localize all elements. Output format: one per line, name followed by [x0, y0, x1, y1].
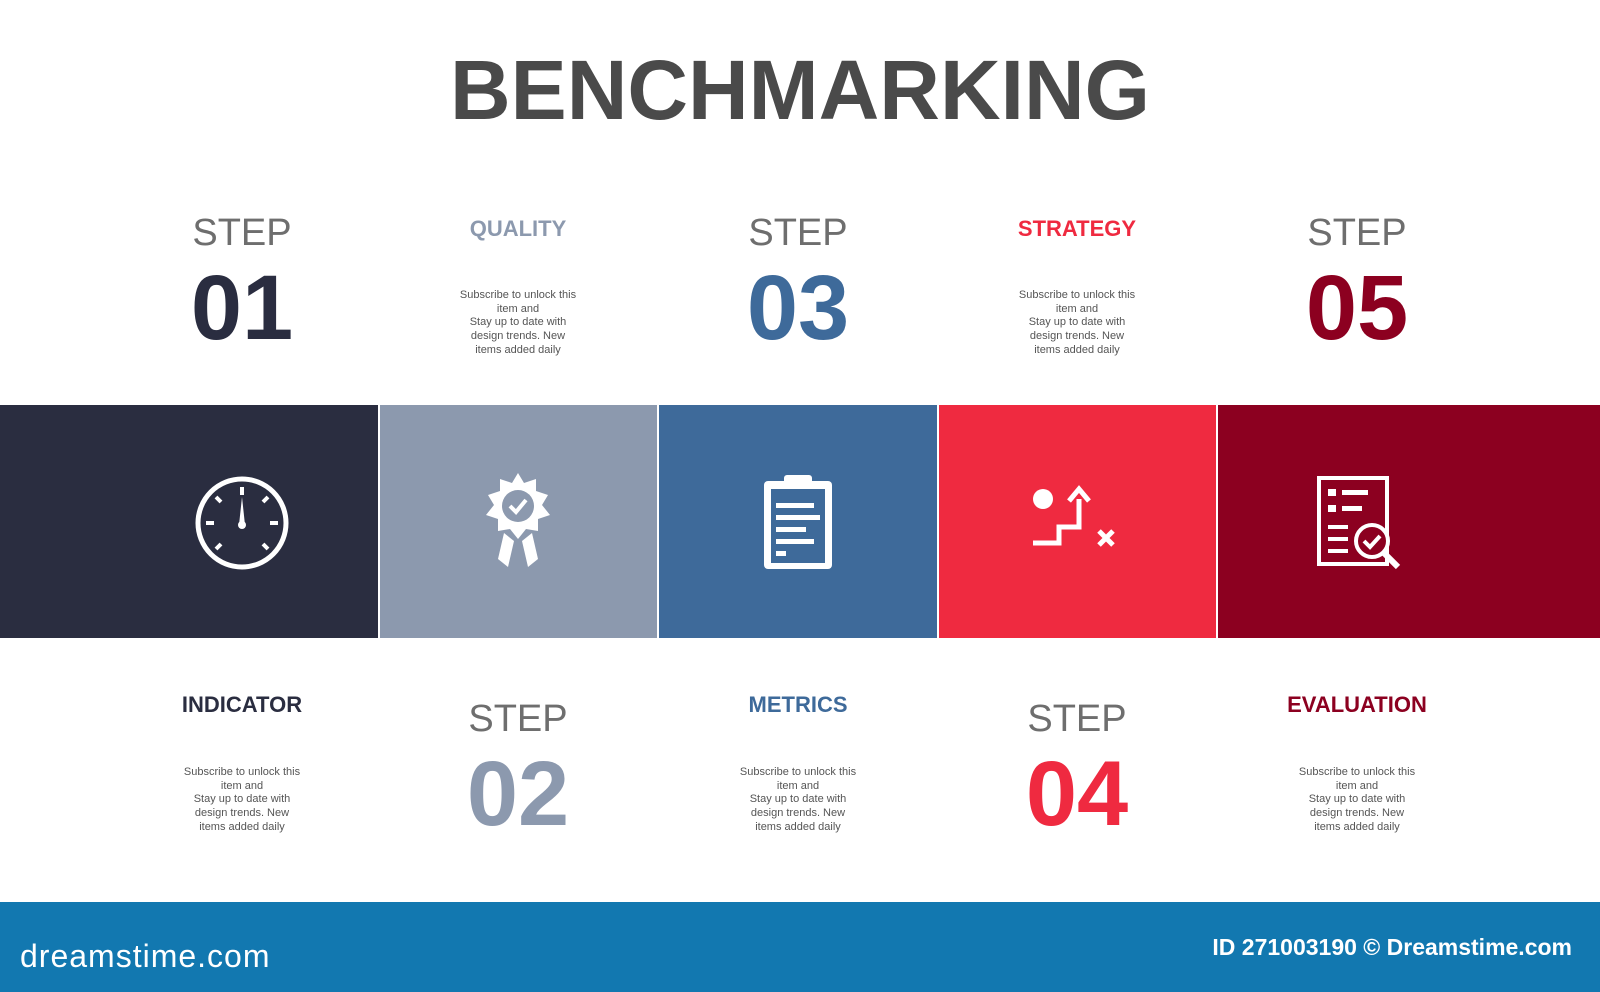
- icon: award: [486, 473, 550, 567]
- text: strategy: Stay up to date with design trends. New items added daily: [1029, 316, 1125, 356]
- step 02: 02: [467, 743, 569, 845]
- step 03: 03: [747, 257, 849, 359]
- text: strategy: Subscribe to unlock this item and: [1019, 289, 1135, 315]
- panel 3: metrics: [659, 405, 937, 638]
- text: quality: Subscribe to unlock this item and: [460, 289, 576, 315]
- panel 1: indicator: [0, 405, 378, 638]
- text: evaluation: [1287, 692, 1427, 833]
- step 04: [1026, 698, 1128, 845]
- panel 4: strategy: [939, 405, 1216, 638]
- text: evaluation: Subscribe to unlock this item and: [1299, 766, 1415, 792]
- icon: gauge: [196, 476, 288, 570]
- step 02: [467, 698, 569, 845]
- footer logo: dreamstime.com: [20, 938, 270, 974]
- text: metrics: [740, 692, 856, 833]
- panel 5: evaluation: [1218, 405, 1600, 638]
- step 01: [191, 212, 293, 359]
- step 01: 01: [191, 257, 293, 359]
- text: metrics: Stay up to date with design trends. New items added daily: [750, 793, 846, 833]
- text: strategy: [1018, 216, 1136, 356]
- step 04: STEP: [1027, 698, 1127, 740]
- step 03: STEP: [748, 212, 848, 254]
- step 05: 05: [1306, 257, 1408, 359]
- footer bar: [0, 902, 1600, 992]
- text: metrics: Subscribe to unlock this item and: [740, 766, 856, 792]
- step 03: [747, 212, 849, 359]
- text: indicator: INDICATOR: [182, 692, 302, 717]
- text: quality: Stay up to date with design trends. New items added daily: [470, 316, 566, 356]
- title: BENCHMARKING: [450, 43, 1150, 137]
- step 05: [1306, 212, 1408, 359]
- step 01: STEP: [192, 212, 292, 254]
- icon: clipboard: [764, 475, 832, 569]
- icon: steps: [1033, 485, 1115, 547]
- text: evaluation: Stay up to date with design trends. New items added daily: [1309, 793, 1405, 833]
- panel 2: quality: [380, 405, 657, 638]
- text: quality: [460, 216, 576, 356]
- text: metrics: METRICS: [748, 692, 848, 717]
- footer id: ID 271003190 © Dreamstime.com: [1212, 934, 1572, 960]
- icon: report search: [1317, 476, 1400, 570]
- step 02: STEP: [468, 698, 568, 740]
- text: strategy: STRATEGY: [1018, 216, 1136, 241]
- text: indicator: [182, 692, 302, 833]
- text: evaluation: EVALUATION: [1287, 692, 1427, 717]
- text: quality: QUALITY: [470, 216, 566, 241]
- text: indicator: Subscribe to unlock this item and: [184, 766, 300, 792]
- step 05: STEP: [1307, 212, 1407, 254]
- step 04: 04: [1026, 743, 1128, 845]
- text: indicator: Stay up to date with design trends. New items added daily: [194, 793, 290, 833]
